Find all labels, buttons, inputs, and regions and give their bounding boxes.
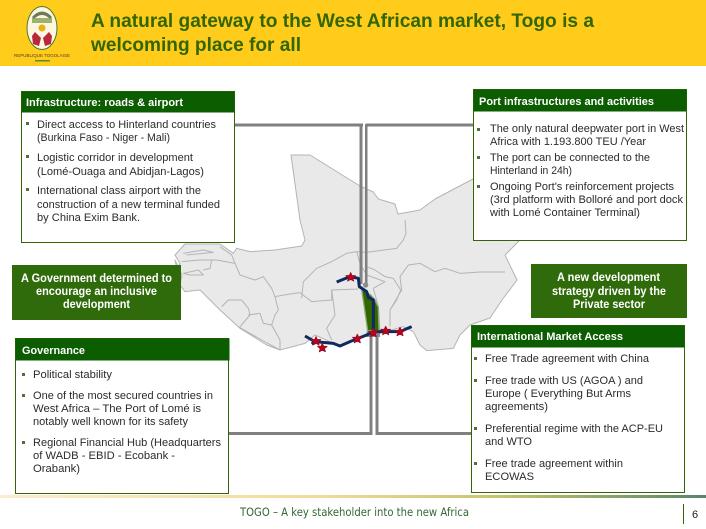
header band xyxy=(0,0,706,66)
heading: infrastructure: Infrastructure: roads & airport xyxy=(26,97,183,109)
bullets: infrastructure: by China Exim Bank. xyxy=(37,212,140,224)
bullets: market access xyxy=(474,353,663,483)
bullets: market access: agreements) xyxy=(485,401,548,413)
bullets: market access: Europe ( Everything But Arms xyxy=(485,388,631,400)
callout: private sector: A new development xyxy=(557,272,660,284)
bullets: governance: West Africa – The Port of Lomé is xyxy=(33,403,202,415)
Togo, corridors and stars xyxy=(305,273,412,352)
bullets: governance: of WADB - EBID - Ecobank - xyxy=(33,450,175,462)
callout: government: A Government determined to xyxy=(21,273,172,285)
bullets: market access: Free trade agreement within xyxy=(485,458,623,470)
panel: infrastructure xyxy=(22,92,234,242)
bullets: governance: Orabank) xyxy=(33,463,80,475)
heading: market access: International Market Access xyxy=(477,331,623,343)
callout: government xyxy=(12,265,181,320)
bullets: market access: Preferential regime with the ACP-EU xyxy=(485,423,663,435)
bullets: governance: One of the most secured countries in xyxy=(33,390,213,402)
bullets: port: The port can be connected to the xyxy=(490,152,650,164)
bullets: infrastructure: Logistic corridor in development xyxy=(37,152,193,164)
bullets: governance xyxy=(22,369,221,475)
title: A natural gateway to the West African market, Togo is a xyxy=(91,10,594,32)
bullets: market access: Free trade with US (AGOA ) and xyxy=(485,375,643,387)
page number xyxy=(683,504,698,524)
bullets: port: Ongoing Port's reinforcement projects xyxy=(490,181,674,193)
bullets: governance: notably well known for its safety xyxy=(33,416,188,428)
title xyxy=(90,10,594,56)
bullets: infrastructure: Direct access to Hinterland countries xyxy=(37,119,216,131)
map landmass and borders xyxy=(175,155,520,351)
bullets: infrastructure: construction of a new terminal funded xyxy=(37,199,220,211)
heading: governance: Governance xyxy=(22,345,85,357)
callout: private sector: Private sector xyxy=(573,299,645,311)
panel: international market access xyxy=(472,326,684,492)
bullets: port: (3rd platform with Bolloré and port dock xyxy=(490,194,683,206)
bullets: infrastructure xyxy=(26,119,220,224)
callout: private sector: strategy driven by the xyxy=(552,286,666,298)
panel: governance xyxy=(16,338,230,494)
bullets: port: The only natural deepwater port in West xyxy=(490,123,684,135)
bullets: governance: Political stability xyxy=(33,369,113,381)
logo: Togo coat of arms: REPUBLIQUE TOGOLAISE xyxy=(14,53,70,59)
callout: government: encourage an inclusive xyxy=(36,286,157,298)
bullets: governance: Regional Financial Hub (Headquarters xyxy=(33,437,221,449)
bullets: market access: ECOWAS xyxy=(485,471,534,483)
bullets: infrastructure: (Lomé-Ouaga and Abidjan-Lagos) xyxy=(37,166,204,178)
connector lines xyxy=(229,124,473,435)
footer text: TOGO – A key stakeholder into the new Africa xyxy=(239,505,469,519)
bullets: infrastructure: International class airport with the xyxy=(37,185,201,197)
heading: port: Port infrastructures and activities xyxy=(479,96,654,108)
callout: government: development xyxy=(63,299,130,311)
bullets: infrastructure: (Burkina Faso - Niger - Mali) xyxy=(37,132,170,144)
bullets: port: Africa with 1.193.800 TEU /Year xyxy=(490,136,646,148)
footer rule xyxy=(0,495,706,498)
panel: port infrastructures xyxy=(474,90,686,240)
bullets: port: Hinterland in 24h) xyxy=(490,165,572,177)
callout: private sector xyxy=(531,264,687,318)
bullets: market access: Free Trade agreement with China xyxy=(485,353,650,365)
title: welcoming place for all xyxy=(90,34,301,56)
bullets: market access: and WTO xyxy=(485,436,532,448)
bullets: port: with Lomé Container Terminal) xyxy=(489,207,640,219)
logo: Togo coat of arms xyxy=(14,6,70,62)
bullets: port xyxy=(477,123,684,219)
page number: 6 xyxy=(692,509,698,521)
map of West Africa with connectors xyxy=(175,124,520,435)
